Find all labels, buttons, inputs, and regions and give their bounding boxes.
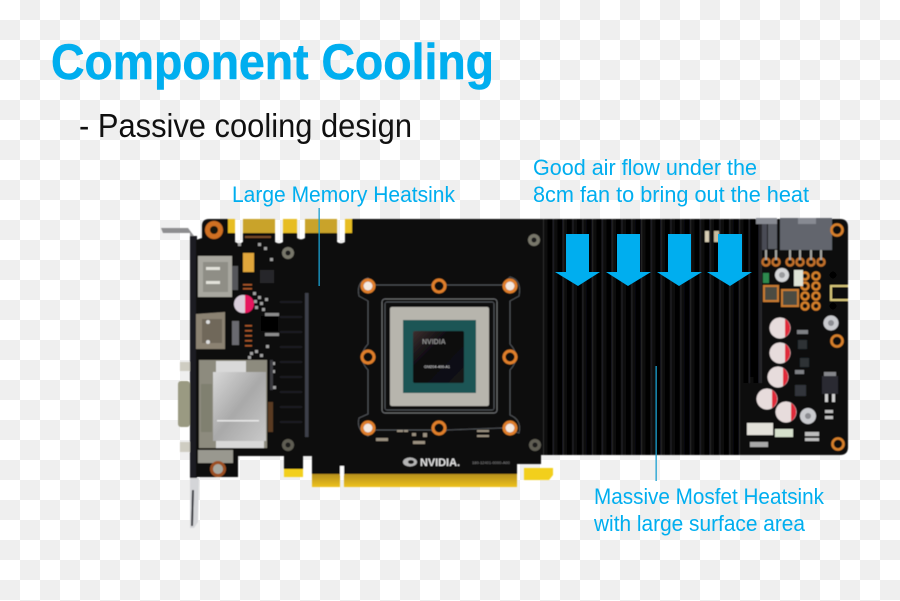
DisplayPort connector — [198, 256, 238, 297]
left board components — [238, 236, 279, 432]
NVIDIA logo: 180-12401-0000-A00 — [472, 460, 511, 465]
GPU die — [413, 331, 464, 383]
NVIDIA logo — [403, 457, 511, 469]
small connector on heatsink — [705, 231, 727, 253]
DVI connector — [178, 360, 267, 452]
power connectors — [762, 219, 767, 250]
memory heatsink plate — [278, 293, 308, 437]
HDMI connector — [196, 312, 239, 349]
graphics card — [161, 218, 848, 528]
circuit board — [196, 219, 848, 477]
ICs and regulators — [822, 376, 838, 394]
GPU bracket outline — [358, 277, 520, 436]
label: good air flow: Good air flow under the — [533, 155, 757, 180]
top gold edge tabs — [228, 219, 352, 233]
leader line: memory heatsink — [318, 208, 320, 286]
die markings: NVIDIA — [422, 339, 446, 346]
mounting bracket — [161, 228, 199, 528]
GPU backplate — [352, 270, 525, 450]
fan header — [747, 423, 773, 435]
connector pins — [762, 258, 824, 266]
leader line: mosfet heatsink — [656, 366, 657, 481]
subtitle: - Passive cooling design — [79, 107, 412, 144]
small aluminium capacitors — [775, 268, 789, 282]
components below GPU — [376, 430, 489, 444]
label: good air flow — [533, 155, 809, 207]
lower connector stub — [198, 450, 233, 463]
label: massive mosfet heatsink: with large surface area — [593, 511, 806, 536]
airflow arrows — [555, 234, 752, 286]
mosfet heatsink fins — [543, 219, 762, 455]
corner and gray screws — [205, 221, 541, 477]
tantalum capacitor — [243, 253, 254, 272]
label: massive mosfet heatsink: Massive Mosfet Heatsink — [594, 484, 825, 509]
gold pads — [802, 272, 820, 310]
die markings — [422, 339, 450, 369]
right board components — [747, 218, 848, 450]
bottom gold PCIe fingers — [284, 466, 553, 487]
inductors — [763, 285, 779, 302]
GPU screws — [362, 280, 516, 434]
label: massive mosfet heatsink — [593, 484, 825, 536]
label: good air flow: 8cm fan to bring out the heat — [533, 182, 809, 207]
label: large memory heatsink: Large Memory Heatsink — [232, 182, 456, 207]
card edge cut-out — [830, 285, 848, 301]
NVIDIA logo: NVIDIA. — [420, 457, 460, 469]
solid capacitor — [234, 295, 254, 313]
die markings: GM204-400-A1 — [424, 365, 450, 369]
title: Component Cooling — [51, 34, 494, 90]
GPU chip shim — [390, 307, 489, 406]
red solid capacitors — [756, 318, 796, 422]
corner screws — [832, 224, 844, 450]
GPU substrate — [403, 320, 476, 393]
